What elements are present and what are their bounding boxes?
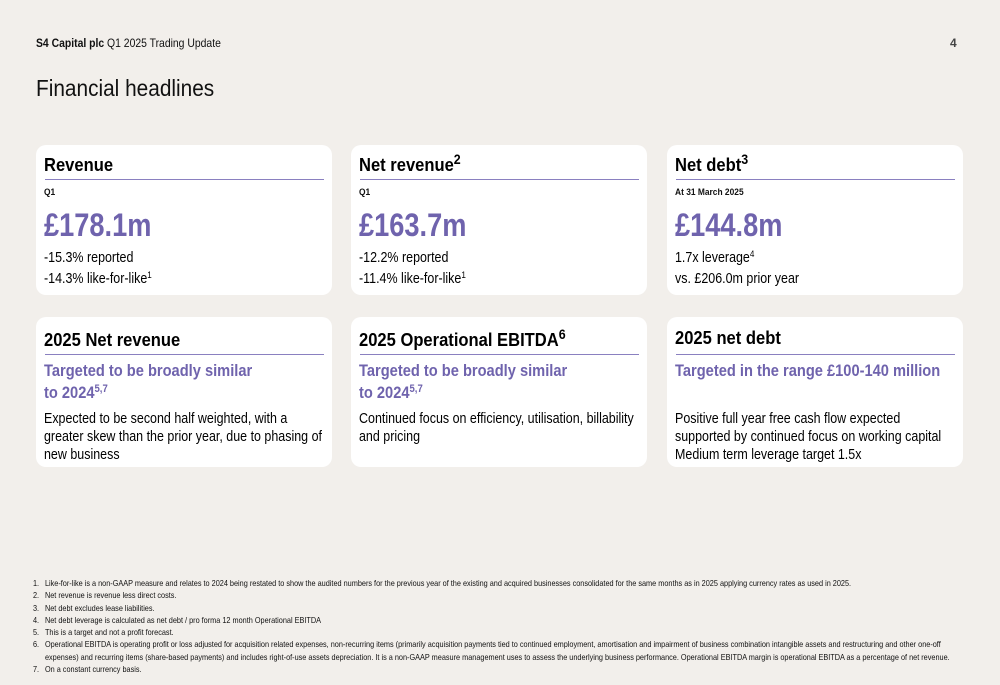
heading: net debt: Net debt3 xyxy=(675,152,748,175)
like-for-like change: -11.4% like-for-like1 xyxy=(359,269,466,287)
target statement xyxy=(44,361,252,402)
heading: revenue: Revenue xyxy=(44,155,113,175)
footnotes xyxy=(33,579,950,674)
outlook text xyxy=(359,411,634,445)
footnotes: 6. xyxy=(33,640,39,649)
heading: net revenue: Net revenue2 xyxy=(359,152,461,175)
panel: net debt xyxy=(667,145,963,295)
footnotes: This is a target and not a profit forecast. xyxy=(45,628,174,637)
date label: At 31 March 2025 xyxy=(675,187,744,198)
like-for-like change: -14.3% like-for-like1 xyxy=(44,269,152,287)
page number: 4 xyxy=(950,36,957,50)
target statement: Targeted to be broadly similar xyxy=(359,361,567,380)
footnotes: 3. xyxy=(33,604,39,613)
footnotes: expenses) and recurring items (share-based payments) and includes right-of-use assets depreciation. It is a non-GAAP measure management uses to assess the underlying business performance. Operational EBITDA margin is operational EBITDA as a percentage of net revenue. xyxy=(45,653,950,662)
outlook text: and pricing xyxy=(359,429,420,445)
footnotes: Net debt leverage is calculated as net debt / pro forma 12 month Operational EBITDA xyxy=(45,616,321,625)
panel: net revenue xyxy=(351,145,647,295)
leverage: 1.7x leverage4 xyxy=(675,248,754,266)
net revenue figure: £163.7m xyxy=(359,206,466,242)
period label: Q1 xyxy=(44,187,55,198)
heading: 2025 net debt: 2025 net debt xyxy=(675,328,781,348)
outlook text: greater skew than the prior year, due to phasing of xyxy=(44,429,322,445)
footnotes: On a constant currency basis. xyxy=(45,665,142,674)
outlook text: supported by continued focus on working capital xyxy=(675,429,941,445)
panel: 2025 operational EBITDA xyxy=(351,317,647,467)
revenue figure: £178.1m xyxy=(44,206,151,242)
outlook text xyxy=(675,411,941,463)
footnotes: 2. xyxy=(33,591,39,600)
target statement xyxy=(359,361,567,402)
prior year comparison: vs. £206.0m prior year xyxy=(675,271,799,287)
target statement: Targeted to be broadly similar xyxy=(44,361,252,380)
title: Financial headlines xyxy=(36,75,214,101)
target statement: Targeted in the range £100-140 million xyxy=(675,361,940,380)
outlook text xyxy=(44,411,322,463)
footnotes: Net debt excludes lease liabilities. xyxy=(45,604,155,613)
outlook text: Medium term leverage target 1.5x xyxy=(675,447,861,463)
outlook text: new business xyxy=(44,447,120,463)
panel: 2025 net revenue xyxy=(36,317,332,467)
panel: 2025 net debt xyxy=(667,317,963,467)
footnotes: 4. xyxy=(33,616,39,625)
header line: S4 Capital plc Q1 2025 Trading Update xyxy=(36,36,221,50)
outlook text: Continued focus on efficiency, utilisation, billability xyxy=(359,411,634,427)
footnotes: Net revenue is revenue less direct costs. xyxy=(45,591,176,600)
footnotes: 5. xyxy=(33,628,39,637)
footnotes: 7. xyxy=(33,665,39,674)
target statement: to 20245,7 xyxy=(44,383,108,402)
footnotes: Operational EBITDA is operating profit or loss adjusted for acquisition related expenses, non-recurring items (primarily acquisition payments tied to continued employment, amortisation and impairment of business combination intangible assets and restructuring and other one-off xyxy=(45,640,941,649)
footnotes: 1. xyxy=(33,579,39,588)
heading: 2025 net revenue: 2025 Net revenue xyxy=(44,330,180,350)
reported change: -15.3% reported xyxy=(44,250,133,266)
target statement: to 20245,7 xyxy=(359,383,423,402)
outlook text: Positive full year free cash flow expected xyxy=(675,411,900,427)
net debt figure: £144.8m xyxy=(675,206,782,242)
heading: 2025 operational EBITDA: 2025 Operational EBITDA6 xyxy=(359,327,566,350)
period label: Q1 xyxy=(359,187,370,198)
outlook text: Expected to be second half weighted, with a xyxy=(44,411,287,427)
panel: revenue xyxy=(36,145,332,295)
footnotes: Like-for-like is a non-GAAP measure and relates to 2024 being restated to show the audited numbers for the previous year of the existing and acquired businesses consolidated for the same months as in 2025 applying currency rates as used in 2025. xyxy=(45,579,851,588)
reported change: -12.2% reported xyxy=(359,250,448,266)
